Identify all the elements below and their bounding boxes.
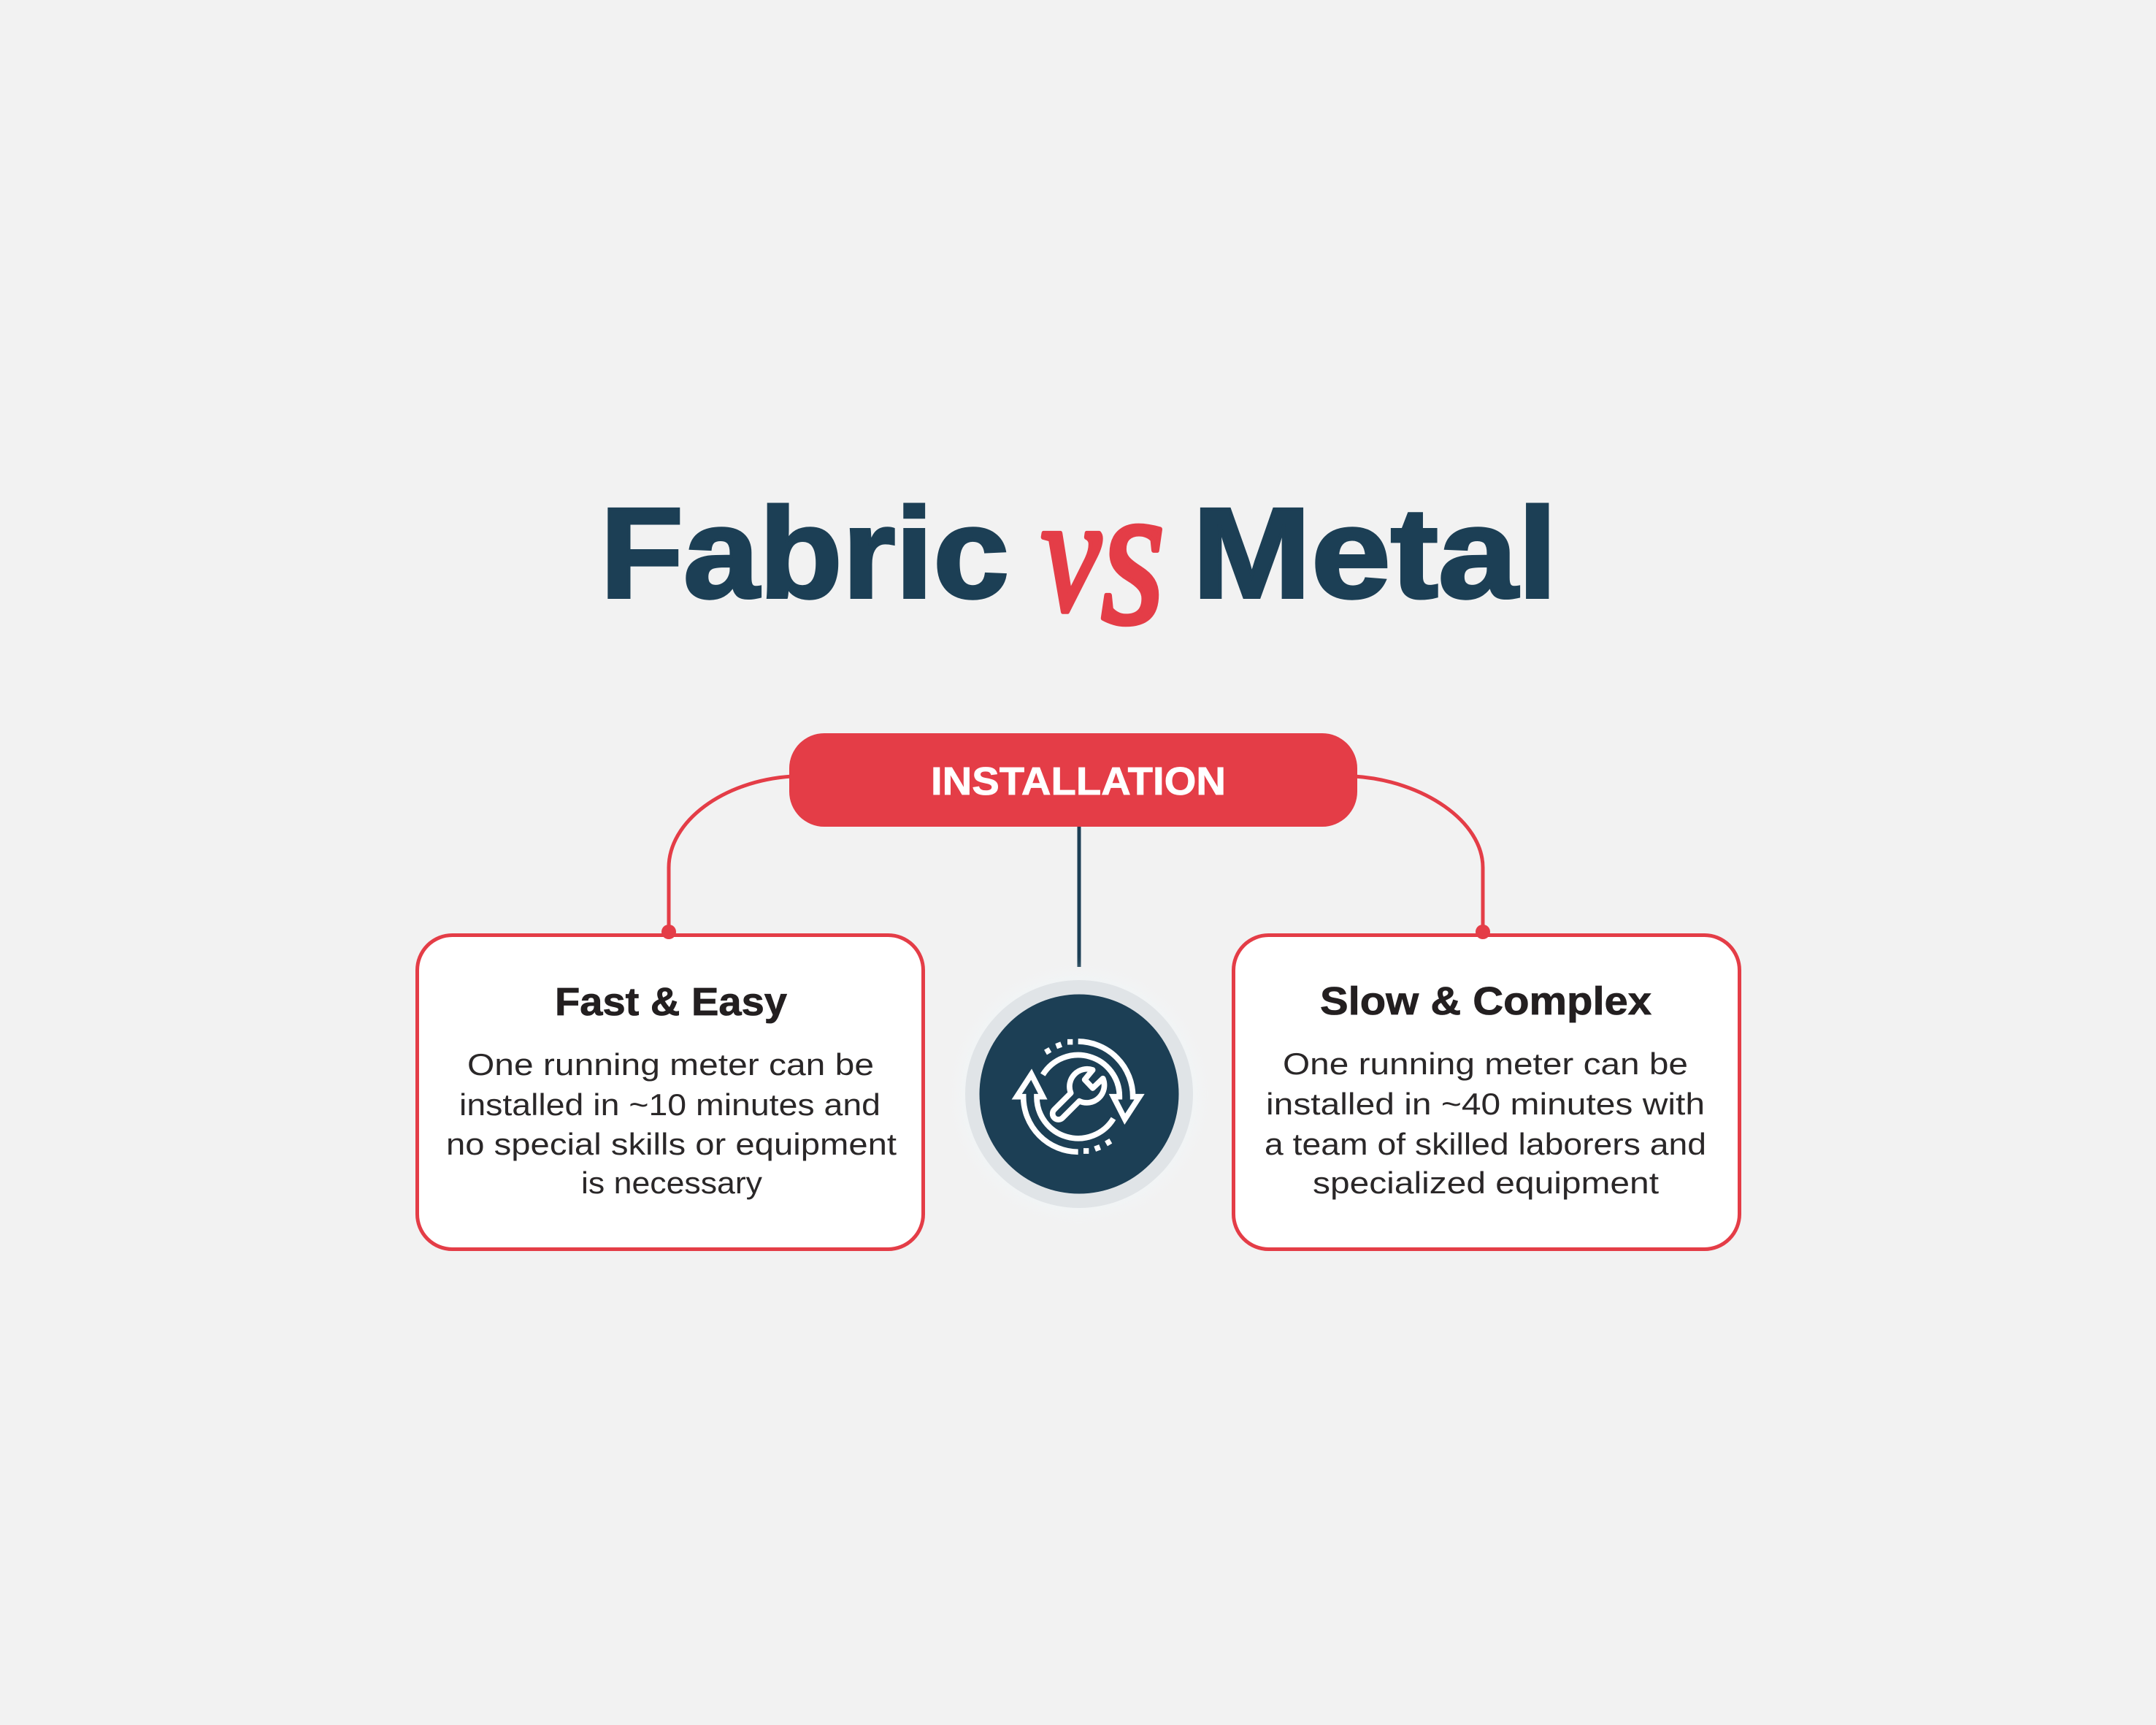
title word: Fabric: Fabric	[600, 482, 1009, 625]
panel heading: fast and easy: Fast & Easy	[555, 980, 787, 1024]
panel body: fabric: One running meter can be	[467, 1047, 874, 1082]
panel body: fabric: installed in ~10 minutes and	[459, 1087, 881, 1122]
icon: wrench with cycle arrows	[961, 976, 1197, 1212]
panel body: fabric	[446, 1047, 897, 1200]
connector: left curve	[661, 776, 792, 939]
panel body: metal	[1265, 1047, 1706, 1200]
pill label: INSTALLATION	[931, 760, 1226, 803]
title word: Metal: Metal	[1192, 482, 1557, 625]
panel body: metal: installed in ~40 minutes with	[1266, 1087, 1705, 1121]
panel heading: slow and complex: Slow & Complex	[1320, 979, 1651, 1023]
connector: right curve	[1354, 776, 1490, 939]
title	[600, 440, 1557, 667]
panel body: metal: specialized equipment	[1313, 1166, 1659, 1200]
panel body: fabric: is necessary	[581, 1166, 762, 1200]
panel body: fabric: no special skills or equipment	[446, 1127, 897, 1161]
panel: metal	[1234, 935, 1739, 1249]
title script: vs: s	[1101, 440, 1165, 667]
panel: fabric	[418, 935, 923, 1249]
title script: vs: v	[1041, 462, 1115, 646]
panel body: metal: a team of skilled laborers and	[1265, 1127, 1706, 1161]
panel body: metal: One running meter can be	[1283, 1047, 1688, 1081]
connector: center line	[1078, 825, 1081, 967]
heading pill: installation	[789, 733, 1357, 827]
